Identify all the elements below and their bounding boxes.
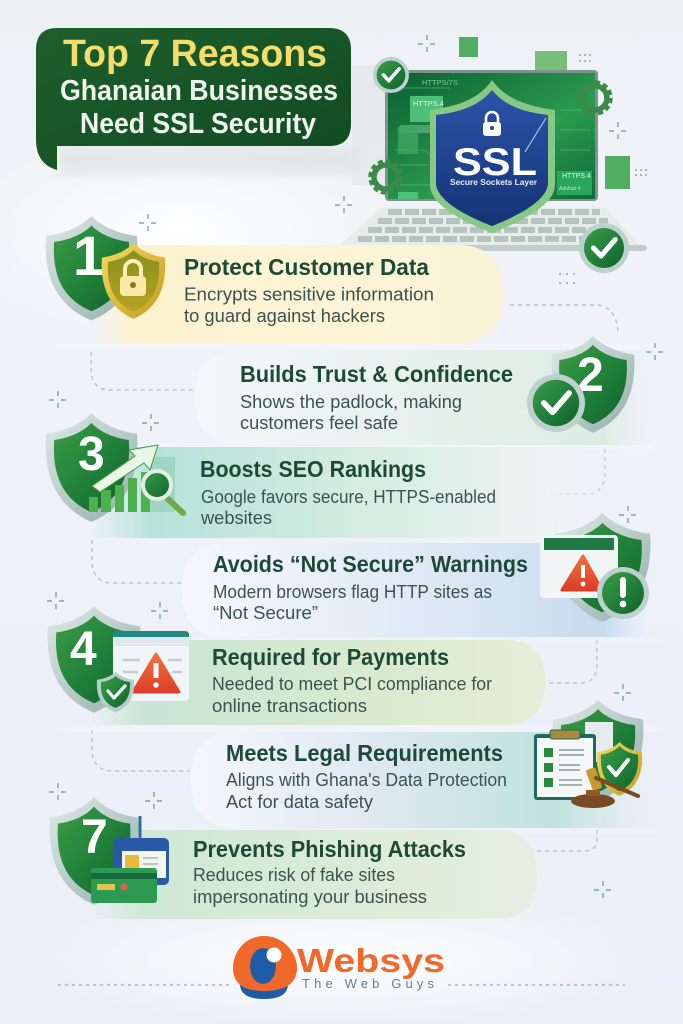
description: Aligns with Ghana's Data Protection xyxy=(226,770,507,790)
numeral 7: 7 xyxy=(81,811,108,864)
title line 1: Top 7 Reasons xyxy=(63,33,327,75)
item 7: Prevents Phishing Attacks xyxy=(50,797,537,919)
padlock xyxy=(483,112,501,136)
laptop screen: Adahub 4 xyxy=(559,186,581,192)
browser window xyxy=(113,631,189,701)
item 1: Protect Customer Data xyxy=(46,216,503,343)
shield 6 xyxy=(553,700,643,801)
growth chart xyxy=(89,445,175,512)
gold padlock shield xyxy=(102,243,165,319)
card 2 xyxy=(195,350,650,445)
check badge bottom xyxy=(579,223,629,273)
heading: Avoids “Not Secure” Warnings xyxy=(213,551,528,577)
item 5: Required for Payments xyxy=(48,606,545,725)
laptop screen xyxy=(385,70,598,201)
description: Needed to meet PCI compliance for xyxy=(212,674,492,694)
wordmark: Websys xyxy=(297,942,445,979)
description: Google favors secure, HTTPS-enabled xyxy=(201,487,496,507)
shield 1 xyxy=(46,216,137,320)
logo: Websys xyxy=(233,936,445,999)
browser warning window xyxy=(540,535,618,598)
card 1 xyxy=(90,245,503,343)
shield 4 xyxy=(555,513,650,622)
dashed connectors xyxy=(91,305,618,851)
shield 3 xyxy=(46,413,137,522)
clipboard xyxy=(534,730,596,800)
dot grids xyxy=(559,54,647,284)
gavel xyxy=(571,767,638,808)
credit card xyxy=(91,868,157,903)
card 4 xyxy=(182,543,650,637)
ID badge xyxy=(113,816,169,885)
description: customers feel safe xyxy=(240,413,398,433)
tagline: The Web Guys xyxy=(302,976,434,991)
shield 5 xyxy=(48,606,140,713)
laptop screen: HTTPS/7S xyxy=(422,78,458,87)
description: Modern browsers flag HTTP sites as xyxy=(213,582,492,602)
numeral 2: 2 xyxy=(577,349,604,402)
description xyxy=(200,487,496,528)
heading: Builds Trust & Confidence xyxy=(240,361,513,387)
description: Encrypts sensitive information xyxy=(184,284,434,304)
floating squares xyxy=(459,37,630,189)
description: Act for data safety xyxy=(226,792,373,812)
logo mark xyxy=(233,936,297,999)
laptop screen: HTTPS.4 xyxy=(413,99,444,108)
description xyxy=(193,865,427,907)
shield 2 xyxy=(552,336,634,433)
description: websites xyxy=(200,508,272,528)
SSL text: SSL xyxy=(453,141,537,184)
description xyxy=(212,674,492,716)
SSL subtitle: Secure Sockets Layer xyxy=(450,177,538,187)
item 4: Avoids Not Secure Warnings xyxy=(182,513,650,637)
card 6 xyxy=(191,732,650,828)
card 5 xyxy=(90,640,545,725)
heading: Prevents Phishing Attacks xyxy=(193,836,466,862)
description xyxy=(226,770,507,812)
description: to guard against hackers xyxy=(184,306,385,326)
description: “Not Secure” xyxy=(213,603,318,623)
title line 3: Need SSL Security xyxy=(80,108,316,140)
check badge xyxy=(527,374,585,432)
numeral 1: 1 xyxy=(73,224,104,287)
heading: Meets Legal Requirements xyxy=(226,740,503,766)
item 6: Meets Legal Requirements xyxy=(191,700,650,828)
description: Reduces risk of fake sites xyxy=(193,865,395,885)
numeral 3: 3 xyxy=(78,428,105,481)
card 3 xyxy=(90,447,620,538)
laptop SSL illustration xyxy=(340,37,647,273)
heading: Protect Customer Data xyxy=(184,254,430,280)
keyboard xyxy=(340,208,647,251)
description: impersonating your business xyxy=(193,887,427,907)
band highlights xyxy=(60,345,660,832)
small check shield xyxy=(97,672,134,713)
magnifier xyxy=(143,471,183,513)
description: online transactions xyxy=(212,696,367,716)
description xyxy=(240,392,462,433)
gold check shield xyxy=(597,742,642,796)
description xyxy=(213,582,492,623)
check badge top xyxy=(373,57,409,93)
item 2: Builds Trust & Confidence xyxy=(195,336,650,445)
gear icons xyxy=(370,162,402,192)
sparkles xyxy=(47,35,664,899)
heading: Required for Payments xyxy=(212,644,449,670)
title line 2: Ghanaian Businesses xyxy=(60,75,338,107)
shield 7 xyxy=(50,797,138,905)
laptop screen: HTTPS.4 xyxy=(562,173,591,180)
SSL shield xyxy=(430,80,555,233)
item 3: Boosts SEO Rankings xyxy=(46,413,620,538)
numeral 4: 4 xyxy=(70,623,97,676)
heading: Boosts SEO Rankings xyxy=(200,456,426,482)
title panel xyxy=(36,28,357,174)
card 7 xyxy=(90,830,537,919)
description: Shows the padlock, making xyxy=(240,392,462,412)
footer dotted lines xyxy=(58,984,625,986)
description xyxy=(184,284,434,326)
exclamation badge xyxy=(597,567,649,619)
